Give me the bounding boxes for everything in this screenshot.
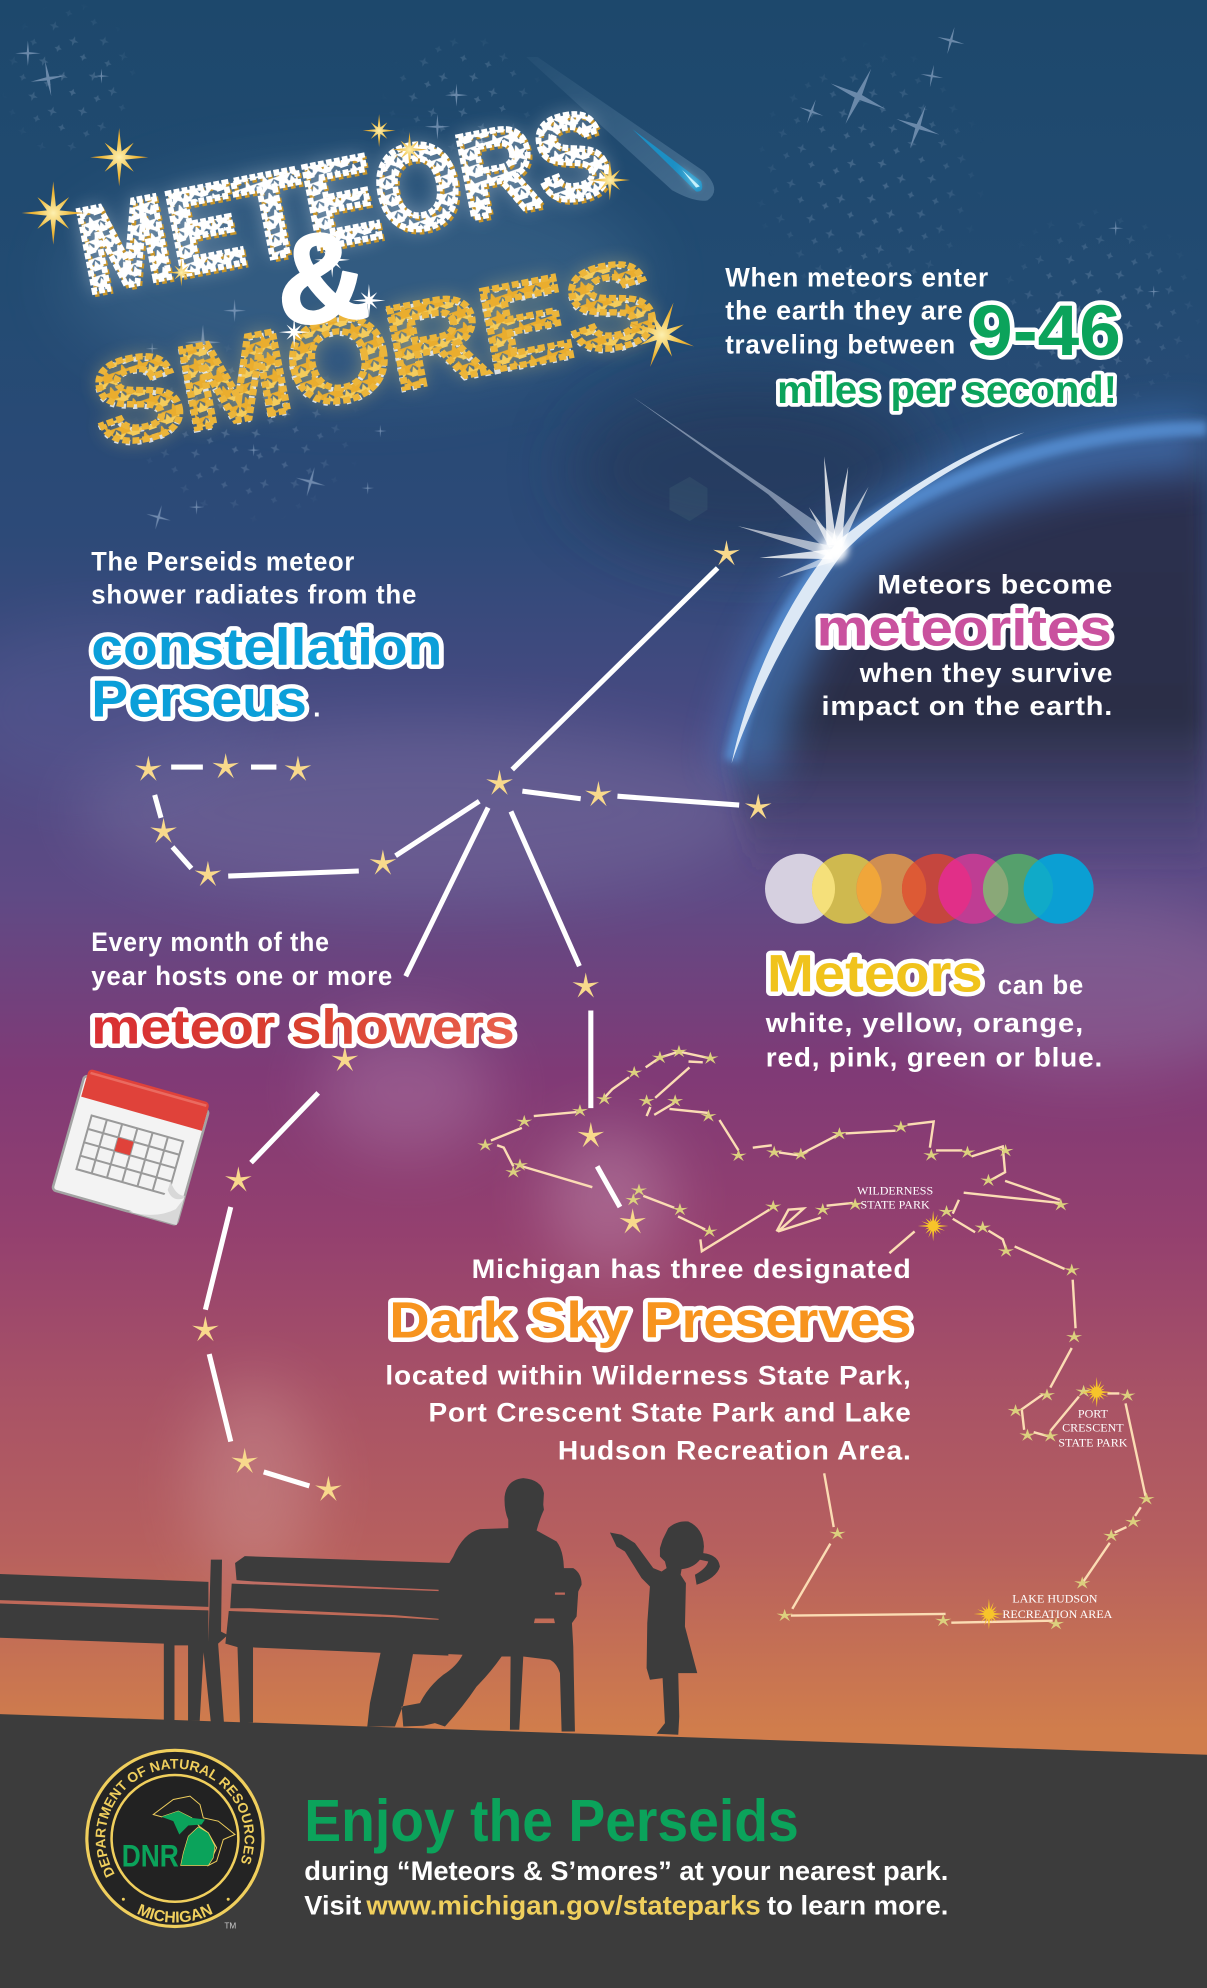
DNR logo bbox=[46, 1716, 304, 1930]
Perseus fact: shower radiates from the bbox=[91, 579, 417, 609]
speed number: 9-46 bbox=[971, 292, 1121, 371]
title bbox=[22, 85, 706, 473]
speed unit: miles per second! bbox=[777, 368, 1117, 412]
Meteors word: Meteors bbox=[767, 944, 983, 1003]
logo bottom text: MICHIGAN bbox=[137, 1904, 213, 1923]
meteor showers fact: year hosts one or more bbox=[91, 961, 393, 991]
meteor colours text: can be bbox=[998, 970, 1084, 1000]
meteor colours circles bbox=[765, 854, 1094, 924]
Wilderness State Park marker bbox=[857, 1183, 950, 1243]
meteor colours text: white, yellow, orange, bbox=[765, 1008, 1084, 1038]
footer call to action bbox=[304, 1787, 948, 1920]
title word: Smores: SMORES bbox=[82, 234, 666, 471]
meteor showers fact: Every month of the bbox=[91, 927, 330, 957]
meteor showers word: meteor showers bbox=[91, 999, 515, 1054]
speed text: When meteors enter bbox=[725, 263, 989, 293]
starfield bbox=[0, 0, 1207, 533]
logo DNR text: DNR bbox=[122, 1837, 179, 1873]
planet earth limb bbox=[633, 397, 1207, 913]
title word: Smores: SMORES bbox=[82, 234, 666, 471]
Port Crescent State Park marker: STATE PARK bbox=[1058, 1436, 1128, 1450]
ground footer panel bbox=[0, 1714, 1207, 1988]
Michigan map constellation bbox=[477, 1045, 1155, 1629]
constellation word: constellation bbox=[91, 618, 442, 676]
Dark Sky fact: Hudson Recreation Area. bbox=[558, 1435, 912, 1465]
Port Crescent State Park marker: CRESCENT bbox=[1062, 1420, 1124, 1434]
Wilderness State Park marker: WILDERNESS bbox=[857, 1183, 933, 1197]
meteor colours text bbox=[765, 944, 1103, 1072]
title sparkles bbox=[22, 114, 706, 379]
meteorites fact bbox=[816, 569, 1113, 721]
title word: Smores: SMORES bbox=[82, 236, 665, 473]
right bench bbox=[225, 1556, 451, 1723]
Perseus constellation lines bbox=[155, 568, 739, 1486]
icon: calendar bbox=[52, 1068, 211, 1225]
silhouette: man on bench bbox=[367, 1478, 582, 1731]
title word: Meteors: METEORS bbox=[67, 85, 620, 318]
silhouette: girl pointing bbox=[610, 1521, 720, 1735]
title ampersand: & bbox=[268, 202, 374, 353]
Perseus word: Perseus bbox=[91, 670, 307, 728]
title word: Meteors: METEORS bbox=[70, 88, 623, 321]
logo ring text: DEPARTMENT OF NATURAL RESOURCES bbox=[96, 1759, 254, 1878]
logo map bbox=[153, 1796, 235, 1865]
meteorites fact: when they survive bbox=[859, 658, 1113, 688]
title word: Meteors: METEORS bbox=[67, 85, 620, 318]
left bench bbox=[0, 1560, 228, 1723]
footer heading: Enjoy the Perseids bbox=[304, 1787, 799, 1854]
footer call to action: www.michigan.gov/stateparks bbox=[365, 1890, 761, 1920]
comet bbox=[526, 57, 714, 201]
Perseus fact: . bbox=[313, 692, 321, 722]
Lake Hudson Recreation Area marker bbox=[972, 1592, 1113, 1630]
Dark Sky fact bbox=[385, 1254, 912, 1465]
Dark Sky fact: Michigan has three designated bbox=[472, 1254, 912, 1284]
meteor showers fact bbox=[91, 927, 515, 1054]
Perseus constellation stars bbox=[135, 540, 771, 1501]
Dark Sky fact: Port Crescent State Park and Lake bbox=[429, 1397, 912, 1427]
meteorites word: meteorites bbox=[816, 599, 1112, 657]
meteorites fact: impact on the earth. bbox=[822, 691, 1113, 721]
speed fact bbox=[725, 263, 1121, 412]
Dark Sky fact: located within Wilderness State Park, bbox=[385, 1360, 912, 1390]
Port Crescent State Park marker bbox=[1058, 1376, 1128, 1450]
Perseus fact: The Perseids meteor bbox=[91, 547, 355, 577]
Lake Hudson Recreation Area marker: RECREATION AREA bbox=[1002, 1607, 1113, 1621]
Perseus fact bbox=[91, 547, 442, 728]
Wilderness State Park marker: STATE PARK bbox=[861, 1197, 930, 1211]
Port Crescent State Park marker: PORT bbox=[1078, 1406, 1109, 1420]
speed fact: the earth they are bbox=[725, 295, 964, 325]
meteor colours text: red, pink, green or blue. bbox=[766, 1042, 1103, 1072]
footer call to action: to learn more. bbox=[767, 1890, 948, 1920]
footer line 1: during “Meteors & S’mores” at your nearest park. bbox=[304, 1856, 948, 1886]
meteorites fact: Meteors become bbox=[877, 569, 1113, 599]
speed fact: traveling between bbox=[725, 330, 956, 360]
Lake Hudson Recreation Area marker: LAKE HUDSON bbox=[1012, 1592, 1098, 1606]
footer line 2: Visit bbox=[304, 1890, 361, 1920]
silhouette: benches bbox=[0, 1556, 451, 1723]
logo trademark: TM bbox=[224, 1921, 236, 1930]
Dark Sky word: Dark Sky Preserves bbox=[389, 1292, 912, 1349]
